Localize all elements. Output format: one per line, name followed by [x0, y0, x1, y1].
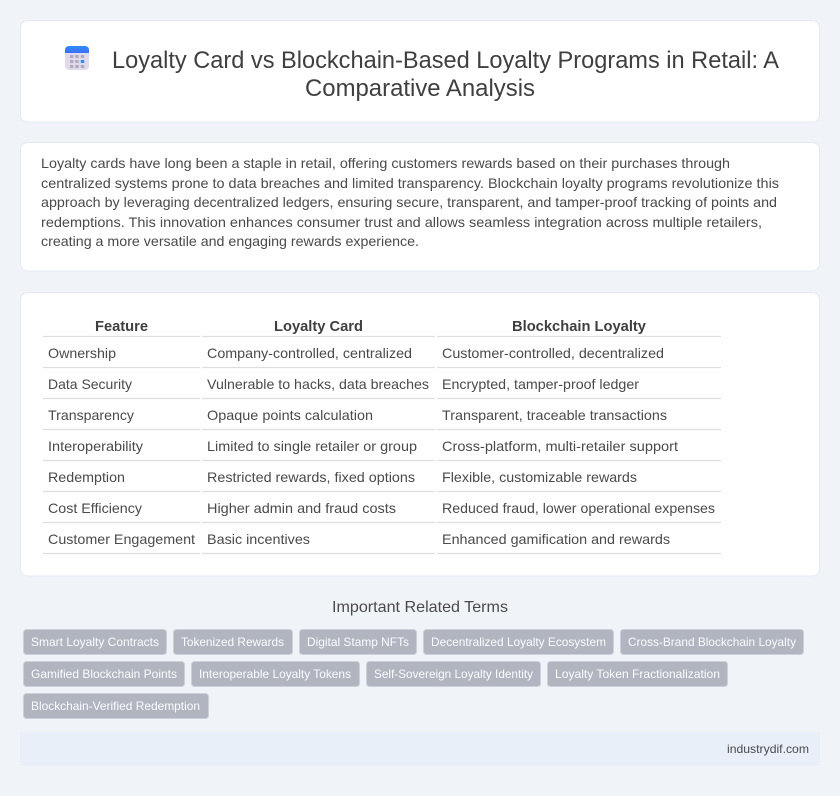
- table row: cost efficiency: Cost Efficiency: [48, 500, 142, 516]
- tag: decentralized loyalty ecosystem: [424, 630, 614, 654]
- table row: customer engagement: Basic incentives: [207, 531, 310, 547]
- title: Loyalty Card vs Blockchain-Based Loyalty Programs in Retail: A: [112, 47, 779, 74]
- table row: ownership: [48, 345, 664, 361]
- tag: gamified blockchain points: [24, 662, 184, 686]
- text block: introduction paragraph: creating a more versatile and engaging rewards experience.: [41, 233, 419, 249]
- footer: [20, 732, 820, 766]
- tag: interoperable loyalty tokens: [192, 662, 360, 686]
- table header row: Loyalty Card: [274, 318, 363, 335]
- table row: redemption: Restricted rewards, fixed options: [207, 469, 415, 485]
- table row: transparency: Opaque points calculation: [207, 407, 373, 423]
- text block: introduction paragraph: Loyalty cards have long been a staple in retail, offering customers rewards based on their purchases through: [41, 155, 730, 171]
- table row: interoperability: Cross-platform, multi-retailer support: [442, 438, 678, 454]
- tag: loyalty token fractionalization: Loyalty Token Fractionalization: [555, 667, 720, 681]
- table row: data security: Data Security: [48, 376, 132, 392]
- tag: digital stamp nfts: Digital Stamp NFTs: [307, 635, 409, 649]
- table header row: Feature: [95, 318, 148, 335]
- panel: header: [20, 20, 820, 122]
- panel: introduction: [20, 142, 820, 271]
- title: [112, 47, 779, 102]
- tag: gamified blockchain points: Gamified Blockchain Points: [31, 667, 177, 681]
- panel: related term tags: [24, 630, 804, 718]
- table row: redemption: Flexible, customizable rewards: [442, 469, 637, 485]
- tag: cross-brand blockchain loyalty: Cross-Brand Blockchain Loyalty: [628, 635, 796, 649]
- table row: ownership: Company-controlled, centralized: [207, 345, 412, 361]
- table row: data security: Encrypted, tamper-proof ledger: [442, 376, 639, 392]
- table row: customer engagement: Customer Engagement: [48, 531, 195, 547]
- tag: tokenized rewards: [174, 630, 292, 654]
- tag: blockchain-verified redemption: Blockchain-Verified Redemption: [31, 699, 200, 713]
- table row: transparency: Transparency: [48, 407, 134, 423]
- footer: industrydif.com: [727, 742, 809, 756]
- table row: ownership: Customer-controlled, decentralized: [442, 345, 664, 361]
- table row: redemption: [48, 469, 637, 485]
- text block: introduction paragraph: redemptions. This innovation enhances consumer trust and allows seamless integration across multiple retailers,: [41, 214, 762, 230]
- tag: self-sovereign loyalty identity: [366, 662, 540, 686]
- heading: important related terms: Important Related Terms: [332, 599, 508, 616]
- table row: interoperability: Limited to single retailer or group: [207, 438, 417, 454]
- table header row: [95, 318, 647, 335]
- table row: ownership: Ownership: [48, 345, 116, 361]
- tag: loyalty token fractionalization: [548, 662, 728, 686]
- text block: introduction paragraph: approach by leveraging decentralized ledgers, ensuring secure, transparent, and tamper-proof tracking of points and: [41, 194, 777, 210]
- tag: tokenized rewards: Tokenized Rewards: [181, 635, 284, 649]
- tag: smart loyalty contracts: [24, 630, 166, 654]
- table row: customer engagement: Enhanced gamification and rewards: [442, 531, 670, 547]
- tag: smart loyalty contracts: Smart Loyalty Contracts: [31, 635, 159, 649]
- text block: introduction paragraph: centralized systems prone to data breaches and limited transparency. Blockchain loyalty programs revolutionize this: [41, 175, 779, 191]
- table row: transparency: Transparent, traceable transactions: [442, 407, 667, 423]
- tag: digital stamp nfts: [300, 630, 416, 654]
- table row: cost efficiency: Higher admin and fraud costs: [207, 500, 396, 516]
- table row: transparency: [48, 407, 667, 423]
- title: Comparative Analysis: [305, 75, 535, 102]
- tag: self-sovereign loyalty identity: Self-Sovereign Loyalty Identity: [374, 667, 533, 681]
- table row: interoperability: [48, 438, 678, 454]
- table row: data security: [48, 376, 639, 392]
- table row: data security: Vulnerable to hacks, data breaches: [207, 376, 429, 392]
- panel: comparison table: [20, 292, 820, 576]
- table row: customer engagement: [48, 531, 670, 547]
- text block: introduction paragraph: [41, 155, 779, 249]
- table row: redemption: Redemption: [48, 469, 125, 485]
- table row: cost efficiency: Reduced fraud, lower operational expenses: [442, 500, 715, 516]
- tag: decentralized loyalty ecosystem: Decentralized Loyalty Ecosystem: [431, 635, 606, 649]
- icon: calendar: [65, 46, 89, 70]
- table row: cost efficiency: [48, 500, 715, 516]
- tag: interoperable loyalty tokens: Interoperable Loyalty Tokens: [199, 667, 351, 681]
- tag: cross-brand blockchain loyalty: [620, 630, 804, 654]
- table row: interoperability: Interoperability: [48, 438, 143, 454]
- tag: blockchain-verified redemption: [24, 694, 208, 718]
- table header row: Blockchain Loyalty: [512, 318, 647, 335]
